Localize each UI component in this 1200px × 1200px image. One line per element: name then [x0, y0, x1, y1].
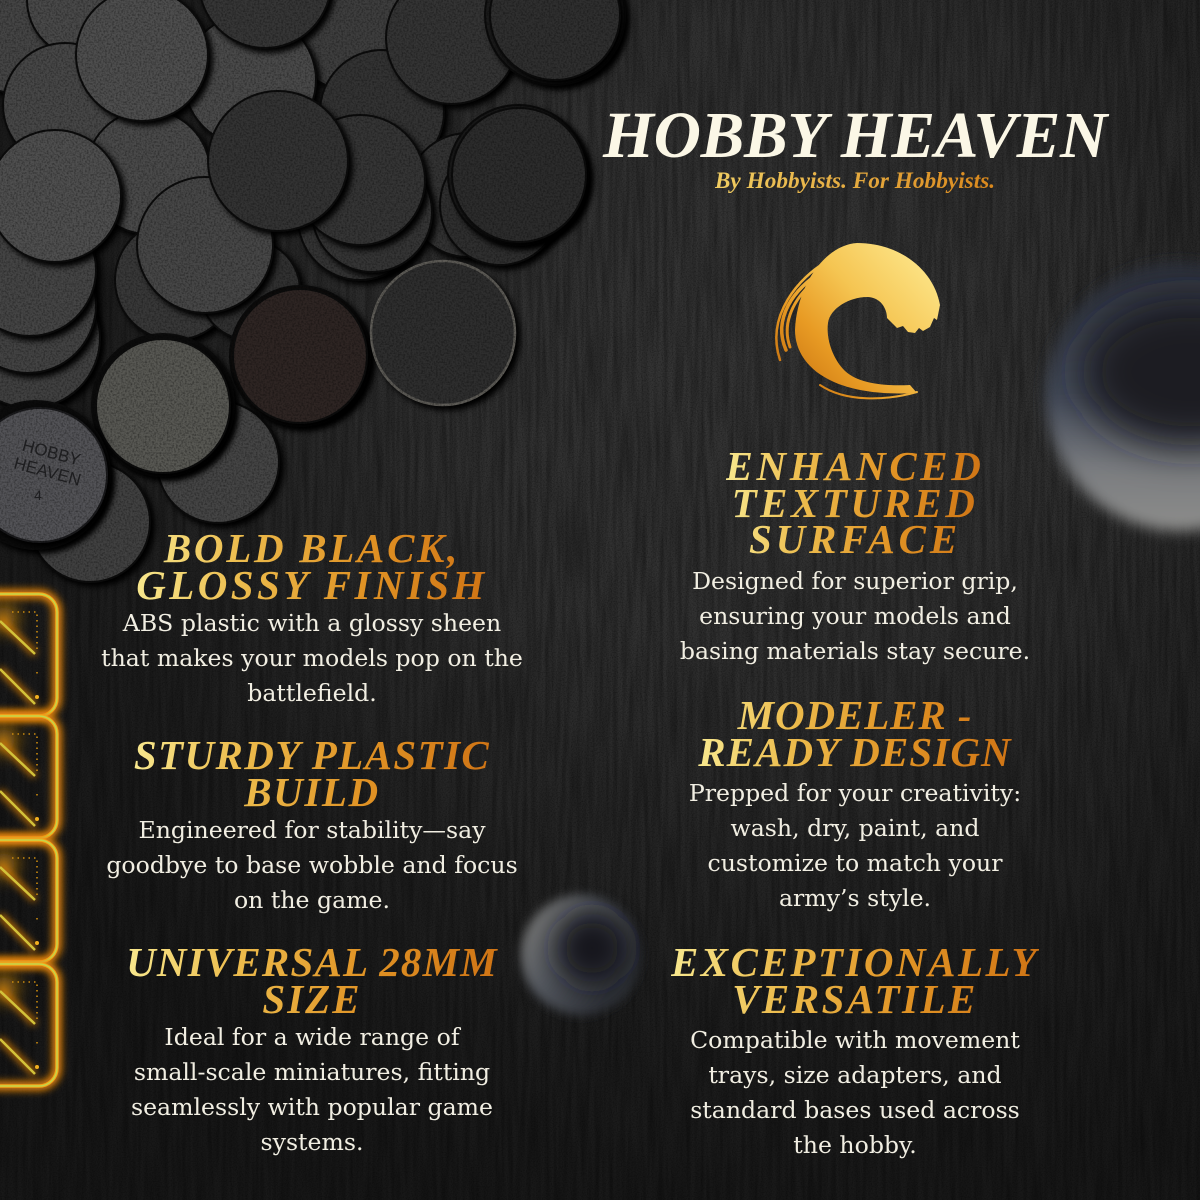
description [101, 608, 523, 707]
description: army’s style. [779, 884, 931, 912]
feature: bold black glossy finish [101, 534, 523, 707]
description [689, 778, 1021, 912]
description [690, 1026, 1020, 1159]
description [680, 567, 1030, 665]
description: trays, size adapters, and [708, 1061, 1002, 1089]
disc engraving: HEAVEN [12, 454, 83, 490]
description: battlefield. [247, 679, 377, 707]
heading [671, 944, 1039, 1017]
description: ensuring your models and [699, 602, 1011, 630]
description: Engineered for stability—say [138, 816, 486, 844]
title [602, 100, 1110, 194]
description: Designed for superior grip, [692, 567, 1018, 595]
feature: exceptionally versatile [671, 948, 1039, 1159]
heading [698, 697, 1012, 770]
tagline: By Hobbyists. For Hobbyists. [715, 168, 995, 194]
heading [134, 737, 490, 810]
description: customize to match your [707, 849, 1003, 877]
disc engraving [12, 436, 83, 503]
description: the hobby. [793, 1131, 917, 1159]
feature: sturdy plastic build [106, 742, 518, 914]
description [106, 816, 518, 914]
feature: enhanced textured surface [680, 452, 1030, 665]
description: standard bases used across [690, 1096, 1020, 1124]
description: basing materials stay secure. [680, 637, 1030, 665]
description: wash, dry, paint, and [731, 814, 979, 842]
description: Ideal for a wide range of [164, 1022, 460, 1050]
description: goodbye to base wobble and focus [106, 851, 518, 879]
feature: universal 28mm size [130, 948, 498, 1156]
description: seamlessly with popular game [131, 1093, 493, 1121]
description: Compatible with movement [690, 1026, 1020, 1054]
heading [136, 530, 488, 603]
description: systems. [261, 1128, 363, 1156]
description: Prepped for your creativity: [689, 778, 1021, 806]
heading [126, 944, 498, 1017]
feature: modeler-ready design [689, 702, 1021, 912]
heading [726, 448, 984, 558]
description: that makes your models pop on the [101, 644, 523, 672]
description [131, 1022, 493, 1156]
description: small-scale miniatures, fitting [134, 1058, 490, 1086]
description: ABS plastic with a glossy sheen [123, 608, 501, 636]
disc engraving: HOBBY [20, 436, 83, 470]
description: on the game. [234, 886, 390, 914]
disc engraving: 4 [34, 487, 42, 503]
brand name: HOBBY HEAVEN [603, 100, 1107, 172]
